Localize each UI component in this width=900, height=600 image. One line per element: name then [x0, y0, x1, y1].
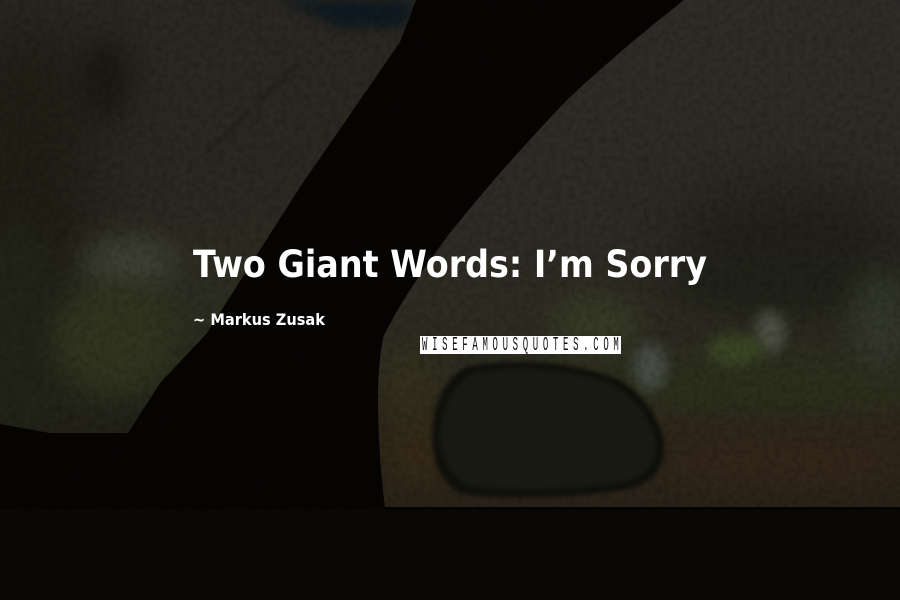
title: Two Giant Words: I’m Sorry: [193, 243, 707, 286]
left window with rain: [0, 0, 420, 440]
watermark badge: WISEFAMOUSQUOTES.COM: [422, 333, 619, 356]
author attribution: ~ Markus Zusak: [193, 310, 325, 329]
right window with rain: [370, 0, 900, 510]
window sill line: [385, 507, 900, 510]
side mirror: [432, 362, 664, 498]
